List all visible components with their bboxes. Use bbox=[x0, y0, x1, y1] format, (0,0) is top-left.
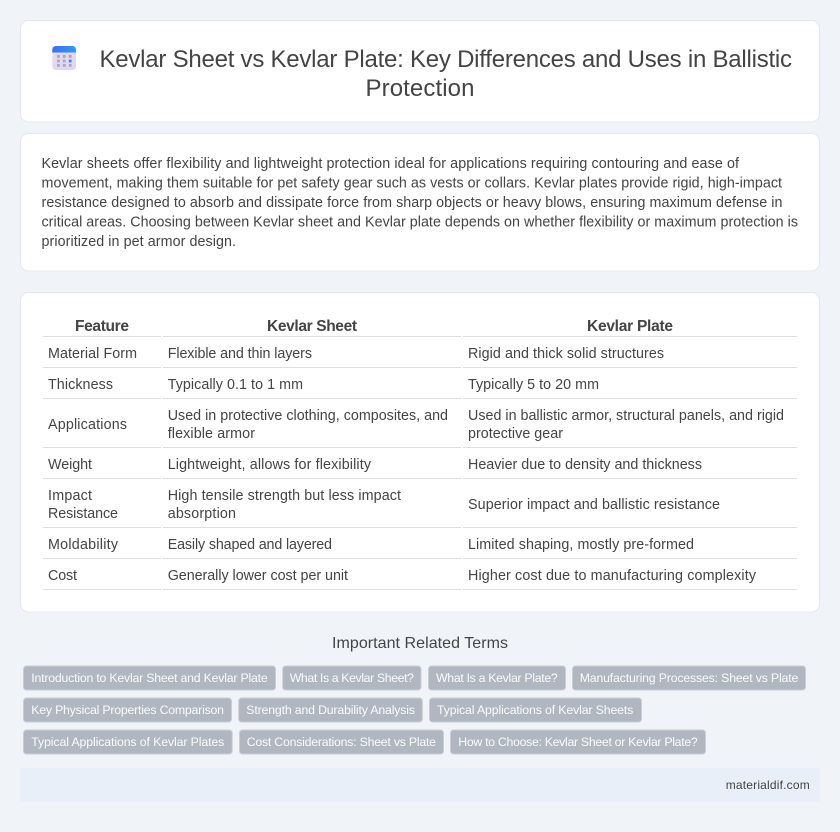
tag bbox=[283, 666, 421, 690]
tag bbox=[24, 730, 232, 754]
row: cost bbox=[48, 568, 757, 584]
table header: Feature bbox=[75, 318, 129, 335]
tag bbox=[240, 730, 444, 754]
tag bbox=[430, 698, 642, 722]
table header: Kevlar Plate bbox=[587, 318, 673, 335]
title: Protection bbox=[366, 75, 474, 102]
tag bbox=[239, 698, 422, 722]
text block: summary: movement, making them suitable for pet safety gear such as vests or collars. Kevlar plates provide rigid, high-impact bbox=[42, 176, 782, 192]
row: applications: Applications bbox=[48, 417, 127, 433]
title: Kevlar Sheet vs Kevlar Plate: Key Differences and Uses in Ballistic bbox=[100, 46, 792, 73]
row: material form bbox=[48, 346, 664, 362]
row: applications: protective gear bbox=[468, 426, 563, 442]
title bbox=[100, 46, 792, 102]
text block: summary: critical areas. Choosing between Kevlar sheet and Kevlar plate depends on whether flexibility or maximum protection is bbox=[42, 214, 798, 230]
tag bbox=[428, 666, 566, 690]
tag: Typical Applications of Kevlar Plates bbox=[31, 735, 224, 749]
heading: related terms: Important Related Terms bbox=[332, 635, 508, 652]
row: impact resistance: Impact bbox=[48, 488, 92, 504]
row: impact resistance: High tensile strength but less impact bbox=[168, 488, 401, 504]
text block: summary: prioritized in pet armor design. bbox=[42, 234, 236, 250]
tag bbox=[24, 666, 276, 690]
panel: summary paragraph bbox=[20, 134, 820, 271]
row: weight: Heavier due to density and thickness bbox=[468, 457, 702, 473]
tag: Introduction to Kevlar Sheet and Kevlar Plate bbox=[31, 671, 268, 685]
related term tags bbox=[24, 666, 806, 754]
tag: What Is a Kevlar Sheet? bbox=[290, 671, 414, 685]
panel: comparison table bbox=[20, 292, 820, 612]
row: material form: Rigid and thick solid structures bbox=[468, 346, 664, 362]
row: weight bbox=[48, 457, 702, 473]
tag: Manufacturing Processes: Sheet vs Plate bbox=[580, 671, 798, 685]
panel: header card bbox=[20, 20, 820, 122]
row: moldability: Easily shaped and layered bbox=[168, 537, 332, 553]
tag bbox=[450, 730, 706, 754]
icon: calendar bbox=[52, 46, 76, 70]
table header bbox=[75, 318, 673, 335]
row: moldability: Limited shaping, mostly pre-formed bbox=[468, 537, 694, 553]
text block: summary: resistance designed to absorb and dissipate force from sharp objects or heavy blows, ensuring maximum defense in bbox=[42, 195, 783, 211]
row: cost: Cost bbox=[48, 568, 77, 584]
footer bar bbox=[20, 768, 820, 802]
row: impact resistance: Resistance bbox=[48, 506, 118, 522]
row: moldability: Moldability bbox=[48, 537, 119, 553]
row: impact resistance bbox=[48, 488, 720, 522]
row: weight: Weight bbox=[48, 457, 92, 473]
tag bbox=[24, 698, 232, 722]
row: thickness bbox=[48, 377, 599, 393]
tag: What Is a Kevlar Plate? bbox=[436, 671, 558, 685]
table header: Kevlar Sheet bbox=[267, 318, 357, 335]
text block: summary: Kevlar sheets offer flexibility and lightweight protection ideal for applications requiring contouring and ease of bbox=[42, 156, 739, 172]
row: material form: Flexible and thin layers bbox=[168, 346, 312, 362]
table rules bbox=[43, 336, 797, 590]
row: thickness: Typically 5 to 20 mm bbox=[468, 377, 599, 393]
row: moldability bbox=[48, 537, 694, 553]
row: applications bbox=[48, 408, 784, 442]
row: applications: flexible armor bbox=[168, 426, 255, 442]
row: impact resistance: absorption bbox=[168, 506, 236, 522]
row: thickness: Typically 0.1 to 1 mm bbox=[168, 377, 303, 393]
tag: How to Choose: Kevlar Sheet or Kevlar Plate? bbox=[458, 735, 698, 749]
row: impact resistance: Superior impact and ballistic resistance bbox=[468, 497, 720, 513]
tag: Key Physical Properties Comparison bbox=[31, 703, 224, 717]
row: cost: Higher cost due to manufacturing complexity bbox=[468, 568, 757, 584]
tag: Typical Applications of Kevlar Sheets bbox=[437, 703, 633, 717]
row: applications: Used in protective clothing, composites, and bbox=[168, 408, 448, 424]
text block: summary bbox=[42, 156, 798, 250]
tag: Strength and Durability Analysis bbox=[246, 703, 415, 717]
row: thickness: Thickness bbox=[48, 377, 113, 393]
row: applications: Used in ballistic armor, structural panels, and rigid bbox=[468, 408, 784, 424]
row: weight: Lightweight, allows for flexibility bbox=[168, 457, 372, 473]
tag: Cost Considerations: Sheet vs Plate bbox=[247, 735, 436, 749]
row: material form: Material Form bbox=[48, 346, 137, 362]
row: cost: Generally lower cost per unit bbox=[168, 568, 348, 584]
footer source: materialdif.com bbox=[726, 778, 810, 792]
tag bbox=[572, 666, 806, 690]
